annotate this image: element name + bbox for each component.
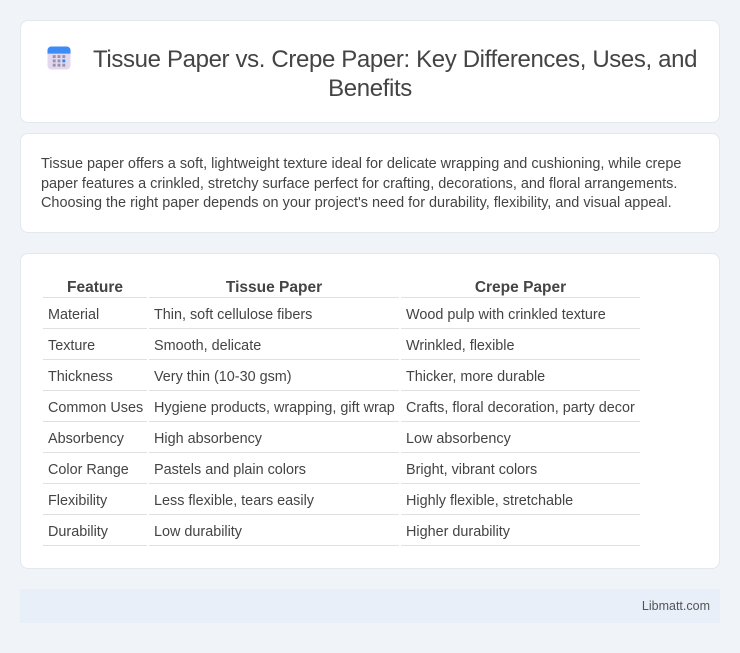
comparison table: High absorbency [154, 431, 262, 447]
panel: table card [20, 253, 720, 569]
comparison table: Less flexible, tears easily [154, 493, 314, 509]
comparison table: Low durability [154, 524, 242, 540]
footer text: Libmatt.com [642, 599, 710, 613]
comparison table: Texture [48, 338, 95, 354]
comparison table [43, 279, 640, 546]
intro text [41, 156, 681, 211]
comparison table: Higher durability [406, 524, 510, 540]
footer bar [20, 589, 720, 623]
comparison table: Color Range [48, 462, 129, 478]
comparison table: Highly flexible, stretchable [406, 493, 573, 509]
comparison table: Low absorbency [406, 431, 511, 447]
comparison table: Tissue Paper [226, 279, 322, 296]
comparison table: Common Uses [48, 400, 143, 416]
title: Tissue Paper vs. Crepe Paper: Key Differences, Uses, and [93, 46, 697, 73]
comparison table: Absorbency [48, 431, 124, 447]
intro text: Choosing the right paper depends on your project's need for durability, flexibility, and visual appeal. [41, 195, 672, 211]
panel: header [20, 20, 720, 123]
comparison table: Crepe Paper [475, 279, 566, 296]
comparison table: Flexibility [48, 493, 107, 509]
icon: calendar [47, 46, 71, 70]
comparison table: Wrinkled, flexible [406, 338, 515, 354]
title [93, 46, 697, 102]
comparison table: Smooth, delicate [154, 338, 261, 354]
panel: intro [20, 133, 720, 233]
comparison table: Crafts, floral decoration, party decor [406, 400, 635, 416]
title: Benefits [328, 75, 412, 102]
comparison table: Hygiene products, wrapping, gift wrap [154, 400, 395, 416]
comparison table: Feature [67, 279, 123, 296]
comparison table: Very thin (10-30 gsm) [154, 369, 292, 385]
comparison table: Wood pulp with crinkled texture [406, 307, 606, 323]
comparison table: Bright, vibrant colors [406, 462, 537, 478]
comparison table: Durability [48, 524, 108, 540]
comparison table: Thicker, more durable [406, 369, 545, 385]
comparison table: Material [48, 307, 99, 323]
comparison table: Thin, soft cellulose fibers [154, 307, 312, 323]
comparison table: Thickness [48, 369, 113, 385]
intro text: Tissue paper offers a soft, lightweight texture ideal for delicate wrapping and cushioning, while crepe [41, 156, 681, 172]
intro text: paper features a crinkled, stretchy surface perfect for crafting, decorations, and floral arrangements. [41, 176, 677, 192]
comparison table: Pastels and plain colors [154, 462, 306, 478]
